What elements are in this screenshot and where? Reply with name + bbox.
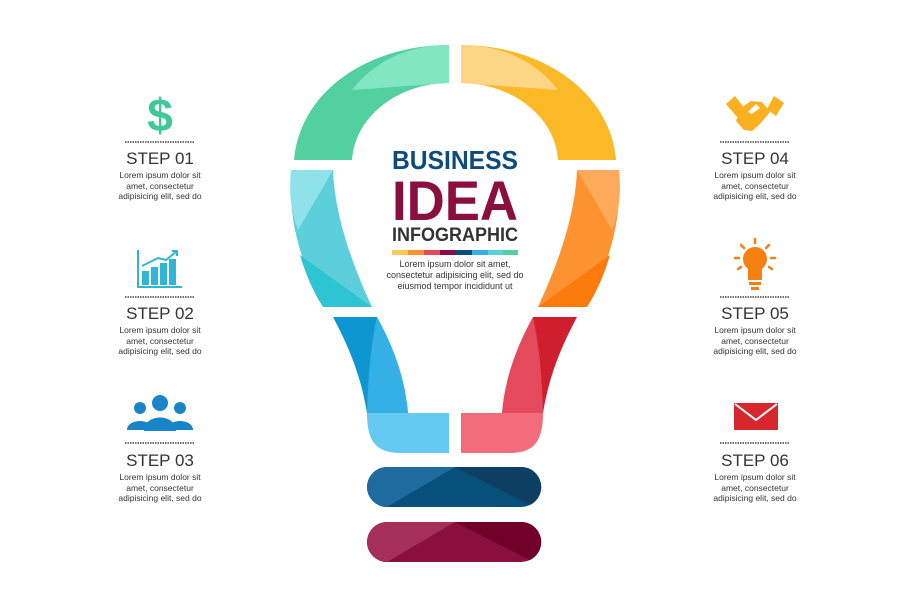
step 04 bbox=[713, 96, 797, 201]
title: BUSINESS: BUSINESS bbox=[392, 145, 518, 175]
icon: people bbox=[127, 395, 193, 431]
center description: eiusmod tempor incididunt ut bbox=[397, 281, 513, 291]
step 06: Lorem ipsum dolor sit bbox=[714, 472, 796, 482]
center description: Lorem ipsum dolor sit amet, bbox=[399, 259, 511, 269]
step 02: amet, consectetur bbox=[126, 336, 194, 346]
step 03: Lorem ipsum dolor sit bbox=[119, 472, 201, 482]
segment: top-left green bbox=[294, 45, 449, 160]
step 02: STEP 02 bbox=[126, 304, 194, 323]
step 05 bbox=[713, 239, 797, 356]
segment: top-right yellow bbox=[461, 45, 616, 160]
step 03: adipisicing elit, sed do bbox=[118, 493, 202, 503]
step 01: adipisicing elit, sed do bbox=[118, 191, 202, 201]
step 06 bbox=[713, 403, 797, 503]
center description bbox=[386, 259, 524, 291]
bulb: right half bbox=[461, 45, 620, 453]
step 02 bbox=[118, 250, 202, 356]
segment: lower-right red bbox=[461, 317, 577, 453]
title: IDEA: IDEA bbox=[392, 169, 518, 232]
step 04: adipisicing elit, sed do bbox=[713, 191, 797, 201]
step 06: adipisicing elit, sed do bbox=[713, 493, 797, 503]
center description: consectetur adipisicing elit, sed do bbox=[386, 270, 524, 280]
base bar: maroon bbox=[367, 522, 541, 562]
step 03 bbox=[118, 395, 202, 503]
step 01 bbox=[118, 89, 202, 201]
title: INFOGRAPHIC: INFOGRAPHIC bbox=[392, 225, 518, 246]
step 04: STEP 04 bbox=[721, 149, 789, 168]
base bar: blue bbox=[367, 467, 541, 507]
icon: envelope bbox=[734, 403, 778, 430]
step 05: amet, consectetur bbox=[721, 336, 789, 346]
icon: chart bbox=[138, 250, 182, 287]
icon: handshake bbox=[726, 96, 784, 131]
step 04: amet, consectetur bbox=[721, 181, 789, 191]
segment: mid-left cyan bbox=[290, 170, 372, 307]
icon: light bulb bbox=[735, 239, 775, 290]
step 05: STEP 05 bbox=[721, 304, 789, 323]
step 02: adipisicing elit, sed do bbox=[118, 346, 202, 356]
step 05: adipisicing elit, sed do bbox=[713, 346, 797, 356]
step 06: STEP 06 bbox=[721, 451, 789, 470]
step 01: STEP 01 bbox=[126, 149, 194, 168]
color strip bbox=[392, 250, 518, 255]
segment: lower-left blue bbox=[333, 317, 449, 453]
step 01: Lorem ipsum dolor sit bbox=[119, 170, 201, 180]
segment: mid-right orange bbox=[538, 170, 620, 307]
step 03: amet, consectetur bbox=[126, 483, 194, 493]
step 02: Lorem ipsum dolor sit bbox=[119, 325, 201, 335]
step 03: STEP 03 bbox=[126, 451, 194, 470]
icon: dollar: $ bbox=[147, 89, 173, 141]
step 04: Lorem ipsum dolor sit bbox=[714, 170, 796, 180]
step 06: amet, consectetur bbox=[721, 483, 789, 493]
step 05: Lorem ipsum dolor sit bbox=[714, 325, 796, 335]
step 01: amet, consectetur bbox=[126, 181, 194, 191]
bulb: left half bbox=[290, 45, 449, 453]
